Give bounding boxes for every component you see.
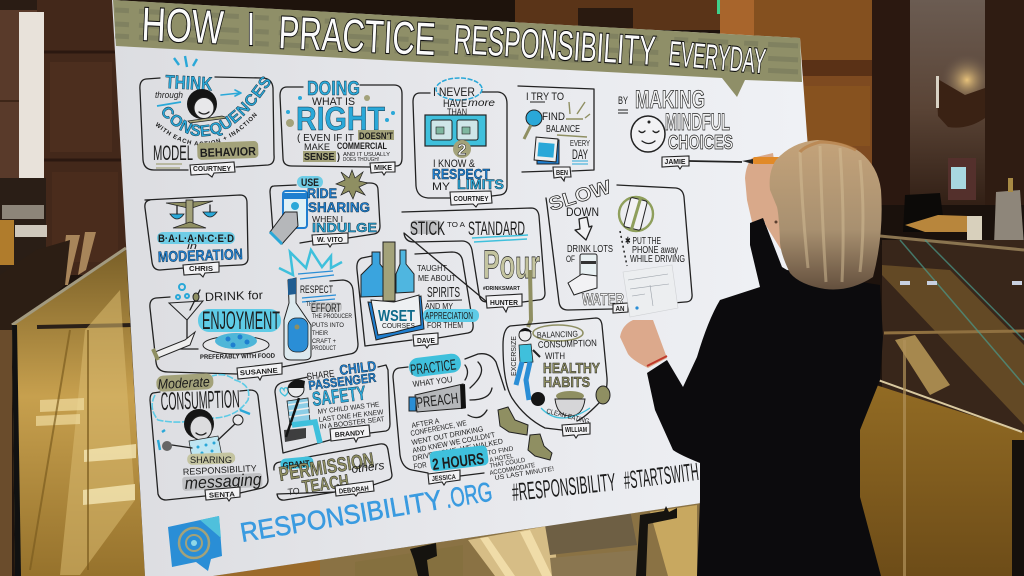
panel: stick to a standard pour: TO A (447, 222, 465, 229)
right wood panels (720, 0, 872, 165)
name tag: partly hidden: AN (616, 306, 624, 313)
panel: drink for enjoyment: PREFERABLY WITH FOOD (200, 353, 275, 361)
name tag: mike: MIKE (374, 165, 392, 172)
panel: moderate consumption: RESPONSIBILITY (183, 463, 257, 477)
panel: balancing consumption: HABITS (543, 374, 590, 391)
panel: slow down: PHONE away (632, 245, 678, 256)
panel: practice what you preach: ACCOMMODATE (489, 462, 536, 477)
panel: wset courses: APPRECIATION (425, 311, 473, 322)
panel: think through consequences: WITH EACH ACTION + INACTION (156, 112, 257, 146)
name tag: deborah: DEBORAH (339, 485, 369, 496)
icon: megaphone: PREACH (415, 390, 459, 412)
highlight: enjoyment (198, 309, 281, 332)
panel: doing what is right: DOES THOUGH! (343, 157, 379, 163)
panel: ride sharing: INDULGE (312, 220, 377, 235)
name tag: dave: DAVE (417, 338, 435, 345)
highlight: practice (408, 353, 462, 378)
name tag: susanne: SUSANNE (240, 368, 278, 377)
name tag: courtney: COURTNEY (454, 196, 489, 203)
raised arm hand and marker (742, 153, 781, 222)
panel: stick to a standard pour: #DRINKSMART (483, 286, 521, 292)
panel: practice what you preach: TO FIND (487, 446, 514, 457)
panel: doing what is right: ( EVEN IF IT (297, 133, 354, 144)
panel: doing what is right (280, 78, 402, 175)
name tag: brandy: BRANDY (335, 430, 365, 439)
panel: slow down: ✱ PUT THE (625, 236, 661, 247)
website url: RESPONSIBILITY (238, 485, 444, 548)
respect my limits: RESPECT (432, 166, 490, 183)
face and ear (765, 190, 790, 260)
title: I (247, 3, 255, 55)
note card (623, 265, 678, 317)
panel: doing what is right: SENSE ) (304, 152, 340, 163)
panel: practice what you preach: DRIVE HOME. WE WALKED (412, 436, 504, 463)
panel: try to find balance: FIND (542, 111, 565, 123)
panel: try to find balance: I TRY TO (526, 91, 564, 103)
panel: drink for enjoyment: PRODUCT (312, 345, 336, 352)
icon: plate of food (203, 333, 269, 354)
panel: never have more than 2: I KNOW & (433, 158, 476, 170)
block: by making mindful choices: BY (618, 95, 628, 107)
panel: child passenger safety: PASSENGER (308, 370, 377, 393)
panel: drink for enjoyment: ENJOYMENT (202, 307, 280, 335)
panel: practice what you preach: FOR (413, 460, 428, 471)
panel: child passenger safety: CHILD (338, 358, 377, 378)
black jacket (647, 218, 883, 576)
icon: hiking boots (498, 407, 552, 460)
name tag: senta: SENTA (209, 491, 235, 500)
text: #RESPONSIBILITY (511, 468, 617, 507)
panel: doing what is right: WHAT IS (312, 96, 355, 108)
panel: try to find balance: EVERY (570, 139, 590, 148)
panel: balancing consumption: HEALTHY (543, 360, 600, 377)
panel: grant permission: TO (287, 486, 300, 497)
panel: never have more than 2: I NEVER (433, 85, 475, 99)
left gold glass balustrade (12, 250, 145, 576)
icon: calendar (534, 137, 559, 164)
heading: doing: DOING (307, 78, 360, 100)
icon: phone in hand (270, 191, 307, 244)
panel: balancing consumption: WITH (545, 351, 565, 361)
panel: ride sharing (270, 170, 380, 247)
title banner (113, 0, 802, 97)
panel: slow down: WATER (582, 290, 624, 309)
title: RESPONSIBILITY (452, 16, 657, 74)
panel: think through consequences: through (155, 90, 183, 100)
panel: wset courses (357, 242, 479, 348)
icon: thought cloud (152, 375, 249, 422)
panel: child passenger safety: IN A BOOSTER SEAT (319, 416, 385, 431)
panel: stick to a standard pour: STICK (410, 219, 445, 240)
block: by making mindful choices: CHOICES (668, 132, 733, 154)
panel: balancing consumption: CLEAN EATING (546, 408, 590, 426)
bracelet (647, 356, 667, 366)
panel: try to find balance (518, 86, 594, 181)
panel: balanced in moderation: in (187, 241, 197, 251)
panel: drink for enjoyment: PUTS INTO (312, 322, 344, 329)
panel: moderate consumption: SHARING (190, 455, 232, 465)
icon: open book: COURSES (382, 323, 415, 330)
name tag: ben: BEN (556, 170, 568, 177)
panel: child passenger safety (275, 358, 390, 453)
name tag: william: WILLIAM (565, 427, 587, 434)
panel: practice what you preach: THAT COULD (489, 457, 526, 470)
name tag: jessica (428, 470, 460, 485)
logo: responsibility.org speech mark (168, 516, 222, 571)
panel: doing what is right: DOESN'T (359, 131, 393, 141)
block: by making mindful choices (618, 86, 742, 169)
panel: never have more than 2: LIMITS (457, 176, 504, 192)
panel: practice what you preach: WHAT YOU (412, 374, 453, 389)
icon: martini glass (153, 284, 203, 360)
icon: calm head (631, 116, 665, 152)
panel: slow down: SLOW (546, 177, 614, 216)
panel: wset courses: FOR THEM (427, 321, 463, 330)
icon: magnifier (524, 110, 542, 139)
icon: bottle (284, 278, 311, 360)
right glass balustrade (882, 240, 1024, 435)
panel: wset courses: AND MY (425, 302, 454, 311)
panel: stick to a standard pour (402, 208, 545, 327)
panel: practice what you preach: AND KNEW WE COULDN'T (412, 430, 496, 455)
panel: balancing consumption: EXCERSIZE (511, 336, 518, 376)
title (141, 0, 767, 81)
icon: blue crown burst (279, 250, 342, 275)
panel: grant permission: TEACH (301, 471, 350, 497)
panel: moderate consumption: messaging (184, 470, 263, 493)
panel: moderate consumption: CONSUMPTION (160, 385, 240, 416)
name tag: chris: CHRIS (189, 266, 213, 273)
icon: open book: WSET (378, 308, 415, 325)
panel: child passenger safety: SHARE (306, 369, 335, 383)
panel: never have more than 2: more (468, 98, 496, 109)
panel: drink for enjoyment (150, 250, 358, 380)
panel: practice what you preach: CONFERENCE, WE (410, 418, 467, 438)
icon: exercising figure (516, 328, 540, 400)
panel: doing what is right: COMMERCIAL (337, 141, 387, 151)
panel: grant permission: PERMISSION (277, 449, 376, 486)
title: EVERYDAY (667, 34, 767, 81)
panel: drink for enjoyment: THE (306, 302, 316, 308)
icon: thinking face (187, 89, 228, 123)
panel: grant permission (274, 444, 392, 500)
panel: slow down: WHILE DRIVING (630, 254, 685, 265)
icon: two glasses (425, 115, 486, 146)
panel: balanced in moderation (145, 195, 248, 277)
icon: woman waving (158, 409, 250, 458)
lower hand (620, 320, 667, 368)
text: #STARTSWITH (622, 458, 700, 495)
panel: balancing consumption (503, 318, 610, 438)
heading: consequences: CONSEQUENCES (162, 76, 271, 137)
panel: slow down: DOWN (566, 205, 599, 219)
panel: never have more than 2: HAVE (443, 98, 467, 110)
panel: grant permission: others (351, 458, 385, 476)
panel: doing what is right: AND IT USUALLY (343, 152, 391, 158)
panel: doing what is right: MAKE (304, 142, 330, 152)
name tag: jamie: JAMIE (664, 159, 686, 166)
panel: never have more than 2: MY (432, 181, 451, 193)
panel: slow down (546, 177, 692, 313)
panel: drink for enjoyment: CRAFT + (312, 338, 336, 345)
block: by making mindful choices: MINDFUL (665, 109, 730, 136)
icon: spirit bottles (361, 242, 414, 301)
panel: drink for enjoyment: THE PRODUCER (312, 314, 353, 320)
whiteboard (112, 0, 835, 576)
icon: crossed out phone (619, 197, 653, 231)
person writing on the board (620, 140, 883, 576)
icon: seated child with seatbelt (280, 380, 320, 443)
panel: practice what you preach: 2 HOURS (431, 451, 485, 474)
panel: child passenger safety: LAST ONE HE KNEW (318, 409, 384, 424)
panel: grant permission: GRANT (282, 459, 310, 472)
panel: practice what you preach: AFTER A (411, 416, 440, 430)
name tag: courtney: COURTNEY (193, 166, 231, 173)
panel: ride sharing: RIDE (307, 185, 337, 201)
panel: slow down: OF (566, 254, 575, 264)
panel: balancing consumption: CONSUMPTION (538, 338, 597, 351)
panel: drink for enjoyment: RESPECT (300, 284, 333, 296)
panel: practice what you preach: PRACTICE (409, 356, 457, 379)
name tag: hunter: HUNTER (490, 300, 518, 307)
highlight: 2 hours (429, 445, 489, 472)
panel: drink for enjoyment: DRINK for (205, 288, 263, 304)
panel: moderate consumption: Moderate (157, 373, 210, 392)
name tag: susanne (237, 363, 282, 380)
easel legs (410, 506, 677, 576)
top centre wall (120, 0, 520, 40)
panel: balancing consumption: BALANCING (537, 329, 578, 340)
icon: balance scale (166, 200, 217, 228)
icon: megaphone (409, 362, 492, 418)
icon: open book (368, 295, 424, 340)
heading: pour: Pour (483, 243, 540, 287)
panel: drink for enjoyment: THEIR (312, 330, 328, 337)
heading: right: RIGHT (296, 100, 385, 137)
name tag: hunter (486, 294, 522, 312)
panel: never have more than 2: THAN (447, 107, 467, 117)
model behavior: MODEL (153, 142, 193, 165)
panel: drink for enjoyment: EFFORT (311, 301, 341, 315)
name tag: partly hidden (613, 303, 628, 313)
panel: moderate consumption (150, 373, 268, 501)
text: balanced: B·A·L·A·N·C·E·D (158, 233, 234, 245)
icon: salad bowl and apple (531, 386, 610, 416)
name tag: jessica: JESSICA (432, 474, 456, 483)
panel: slow down: DRINK LOTS (567, 244, 613, 255)
text: moderation: MODERATION (158, 246, 243, 266)
panel: try to find balance: BALANCE (546, 124, 580, 135)
stairs below board (213, 503, 700, 576)
panel: think through consequences: BEHAVIOR (200, 144, 256, 160)
panel: ride sharing: WHEN I (312, 215, 343, 224)
title: PRACTICE (278, 6, 437, 65)
panel: child passenger safety: SAFETY (311, 382, 368, 411)
panel: stick to a standard pour: STANDARD (468, 219, 525, 240)
heading: think: THINK (165, 72, 213, 95)
panel: child passenger safety: MY CHILD WAS THE (317, 401, 380, 416)
panel: try to find balance: DAY (572, 146, 588, 162)
panel: wset courses: ME ABOUT (418, 273, 456, 283)
name tag: w. vito: W. VITO (317, 237, 344, 244)
panel: practice what you preach: US LAST MINUTE! (494, 466, 555, 482)
panel: never have more than 2: 2 (458, 142, 467, 159)
panel: practice what you preach: A HOTEL (489, 453, 514, 464)
panel: think through consequences (139, 56, 275, 178)
blonde hair (770, 140, 882, 290)
panel: wset courses: TAUGHT (417, 263, 447, 273)
icon: down arrow (575, 217, 592, 240)
icon: khaki star (336, 170, 368, 199)
panel: ride sharing: SHARING (308, 199, 370, 215)
icon: hand holding water glass (568, 254, 597, 295)
panel: wset courses: SPIRITS (427, 284, 460, 301)
panel: ride sharing: USE (301, 177, 319, 189)
block: by making mindful choices: MAKING (635, 86, 705, 114)
panel: never have more than 2 (413, 78, 507, 207)
panel: practice what you preach: WENT OUT DRINKING (411, 424, 484, 447)
website url: .ORG (443, 477, 494, 514)
panel: practice what you preach (393, 353, 555, 485)
